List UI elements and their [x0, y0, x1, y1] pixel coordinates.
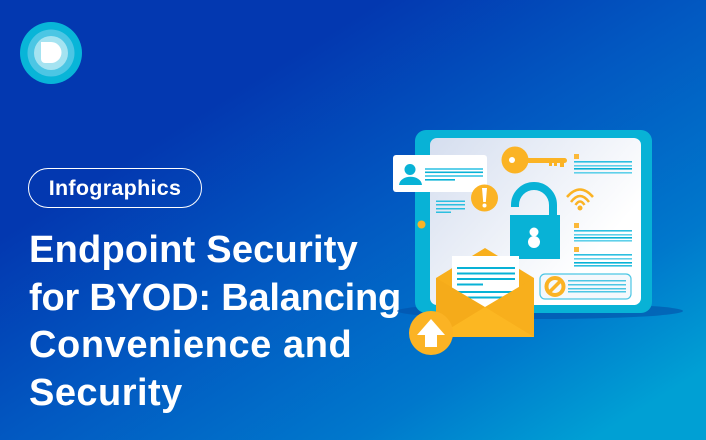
blocked notice — [540, 274, 631, 299]
upload icon — [409, 311, 453, 355]
logo — [20, 22, 82, 84]
title: for BYOD: Balancing — [29, 276, 401, 318]
title: Security — [29, 372, 183, 414]
side dot — [418, 220, 426, 228]
text lines left — [436, 200, 465, 213]
text block mid right — [574, 223, 632, 242]
title: Convenience and — [29, 324, 352, 366]
padlock — [510, 186, 560, 259]
text block lower right — [574, 247, 632, 267]
alert icon — [471, 184, 498, 212]
id card — [393, 155, 487, 192]
tablet frame — [415, 130, 652, 313]
category pill: Infographics — [49, 176, 181, 200]
wifi icon — [567, 190, 593, 210]
key icon — [502, 146, 567, 174]
letter — [452, 256, 519, 311]
title — [29, 229, 401, 414]
text block top right — [574, 154, 632, 174]
envelope — [436, 248, 534, 337]
shadow — [397, 303, 683, 319]
title: Endpoint Security — [29, 229, 358, 271]
category pill — [28, 168, 202, 208]
